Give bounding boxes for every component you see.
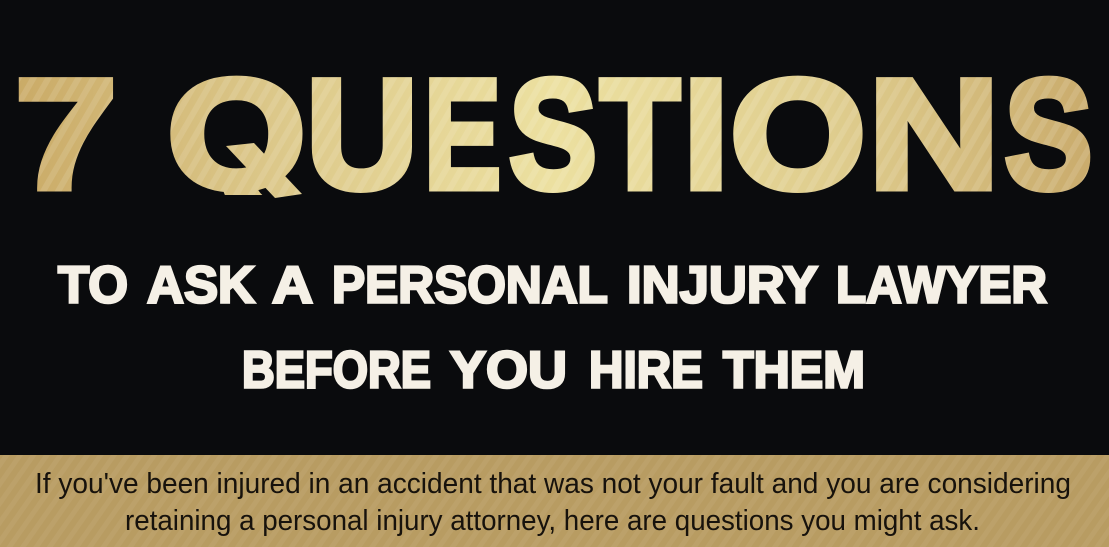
subtitle line 2: THEM: [723, 342, 865, 400]
title: U: [306, 48, 418, 222]
title: Q: [167, 48, 306, 222]
title: S: [509, 48, 597, 222]
title: N: [868, 48, 1000, 222]
title: S: [1004, 48, 1092, 222]
subtitle line 1: A: [272, 257, 313, 315]
intro text line 1: If you've been injured in an accident that was not your fault and you are considering: [35, 468, 1071, 500]
title: [18, 76, 1090, 198]
subtitle line 1: ASK: [147, 257, 255, 315]
subtitle line 1: PERSONAL: [332, 257, 607, 315]
title: T: [600, 48, 680, 222]
subtitle line 2: HIRE: [589, 342, 703, 400]
title: I: [683, 48, 729, 222]
title Q tail accent: [226, 143, 302, 198]
subtitle line 1: TO: [58, 257, 128, 315]
subtitle line 2: YOU: [450, 342, 567, 400]
title: O: [730, 48, 866, 222]
intro band: [0, 455, 1109, 547]
intro text line 2: retaining a personal injury attorney, here are questions you might ask.: [125, 505, 980, 537]
title: 7: [15, 48, 117, 222]
subtitle line 1: LAWYER: [836, 257, 1047, 315]
title: E: [424, 48, 501, 222]
subtitle line 2: BEFORE: [242, 342, 431, 400]
subtitle line 1: INJURY: [627, 257, 817, 315]
